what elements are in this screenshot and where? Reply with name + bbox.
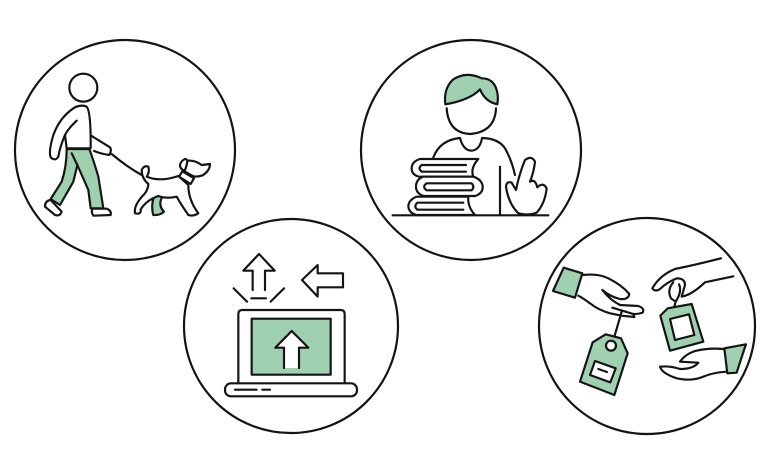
up arrow	[243, 254, 275, 290]
icon: laptop with arrows	[225, 254, 357, 396]
right shoe	[92, 209, 111, 216]
torso and arm	[50, 106, 91, 159]
forearm	[92, 136, 111, 155]
base marks	[235, 386, 270, 393]
laptop base	[225, 383, 357, 396]
laptop lid	[238, 310, 345, 383]
hand pointing	[506, 158, 547, 215]
right tag string	[669, 282, 680, 310]
left hand	[578, 275, 643, 317]
left cuff	[553, 268, 582, 298]
icon: student, books and hand	[393, 75, 548, 215]
screen arrow	[275, 331, 308, 368]
table line	[393, 212, 548, 219]
right tag window	[670, 314, 694, 340]
arm inner line	[65, 121, 77, 135]
right upper hand	[652, 258, 733, 297]
panel: laptop upload	[184, 219, 398, 433]
burst lines	[234, 288, 284, 302]
dog body	[135, 166, 198, 216]
trouser inner line	[72, 153, 77, 165]
right tag	[660, 304, 703, 351]
top book	[412, 159, 478, 177]
dog collar	[179, 171, 194, 184]
left tag hole	[606, 341, 616, 351]
right cuff	[724, 344, 746, 373]
screen	[252, 319, 331, 375]
leash	[112, 154, 142, 175]
left tag	[580, 334, 628, 395]
trousers	[51, 149, 103, 208]
panel: student with books	[361, 40, 581, 260]
head	[69, 74, 97, 102]
icon: hands and tags	[553, 258, 746, 395]
right lower hand	[660, 349, 727, 380]
face	[447, 108, 496, 134]
bottom book	[408, 197, 475, 215]
shoulders and collar	[433, 138, 515, 175]
left arrow	[302, 265, 343, 297]
left shoe	[45, 200, 62, 215]
dog far leg	[152, 196, 164, 215]
panel: person walking a dog	[15, 40, 235, 260]
dog head	[183, 161, 210, 177]
middle book	[416, 177, 483, 196]
panel: hands exchanging price tags	[539, 218, 755, 434]
body centre line	[497, 167, 503, 214]
hair	[445, 75, 498, 104]
left tag label	[590, 361, 616, 382]
dog ear	[180, 159, 187, 171]
icon: person and dog	[45, 74, 210, 216]
left tag string	[614, 312, 622, 337]
